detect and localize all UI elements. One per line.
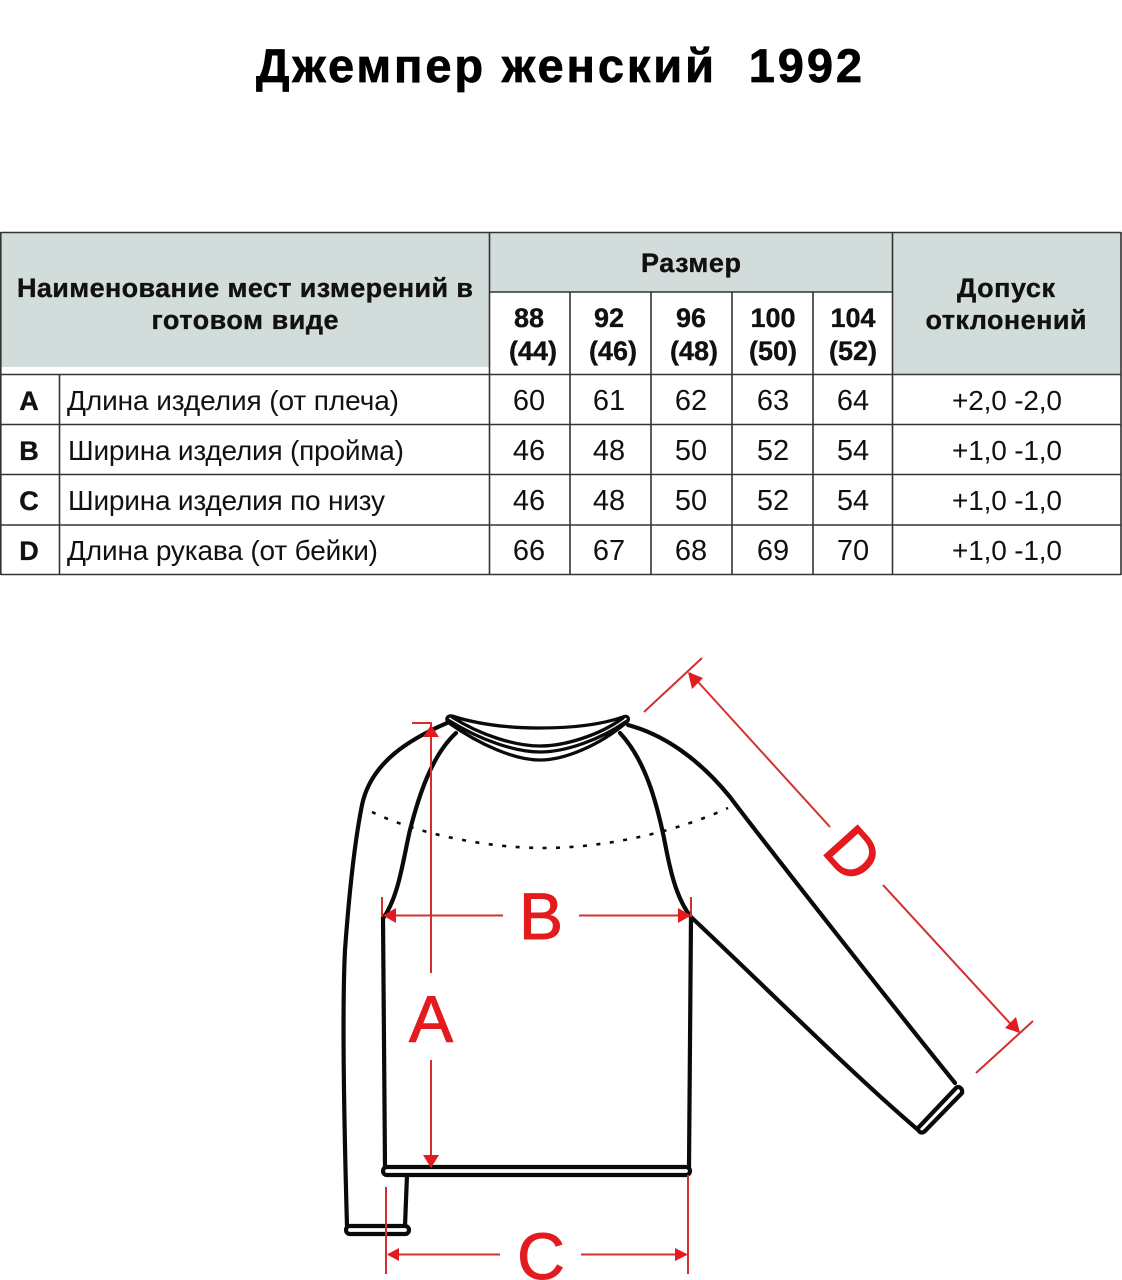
dotted yoke line [372, 808, 728, 848]
header: measurement name: Наименование мест измерений в [17, 273, 473, 303]
header: size: Размер [641, 248, 741, 278]
row C: 52 [757, 485, 789, 517]
row C: +1,0 -1,0 [952, 485, 1062, 516]
row C: 48 [593, 485, 625, 517]
row B [19, 435, 1062, 467]
right raglan seam [620, 733, 691, 917]
table header shading [1, 233, 1121, 374]
measure B: B [519, 879, 563, 953]
row A: 62 [675, 385, 707, 417]
row C: 50 [675, 485, 707, 517]
row C: C [19, 486, 39, 516]
header: size columns: (44) [509, 336, 557, 366]
measure A: A [409, 982, 453, 1056]
row D: 68 [675, 535, 707, 567]
left sleeve cuff [346, 1226, 409, 1234]
jumper outline [344, 716, 962, 1234]
table grid [1, 232, 1121, 575]
row B: +1,0 -1,0 [952, 435, 1062, 466]
header: size columns [509, 303, 877, 366]
size table [1, 232, 1121, 575]
right sleeve [628, 725, 955, 1129]
header: size columns: 96 [676, 303, 706, 333]
row D: 70 [837, 535, 869, 567]
body [383, 917, 691, 1167]
row C [19, 485, 1062, 517]
hem [383, 1167, 690, 1175]
header: size columns: 104 [830, 303, 876, 333]
header: tolerance: Допуск [957, 273, 1055, 303]
row B: 48 [593, 435, 625, 467]
row D [19, 535, 1062, 567]
row A: A [19, 386, 39, 416]
row C: 46 [513, 485, 545, 517]
row B: Ширина изделия (пройма) [68, 435, 404, 466]
header: measurement name [17, 273, 473, 335]
row A: +2,0 -2,0 [952, 385, 1062, 416]
row A: 60 [513, 385, 545, 417]
row A [19, 385, 1062, 417]
measure B [382, 879, 691, 953]
left raglan seam [384, 733, 456, 917]
measure C [386, 1175, 688, 1280]
row B: B [19, 436, 39, 466]
row B: 50 [675, 435, 707, 467]
row D: D [19, 536, 39, 566]
header: size columns: 100 [750, 303, 796, 333]
measure D [644, 658, 1033, 1073]
neckband [447, 716, 628, 760]
title: Джемпер женский 1992 [256, 39, 862, 92]
measure A [409, 723, 453, 1168]
header: size columns: (50) [749, 336, 797, 366]
jumper diagram [344, 658, 1033, 1280]
header: tolerance: отклонений [926, 305, 1086, 335]
row D: +1,0 -1,0 [952, 535, 1062, 566]
row C: 54 [837, 485, 869, 517]
row C: Ширина изделия по низу [68, 485, 385, 516]
row D: Длина рукава (от бейки) [67, 535, 378, 566]
row A: 61 [593, 385, 625, 417]
header: tolerance [926, 273, 1086, 335]
measure D: D [810, 811, 897, 896]
header: size columns: 88 [514, 303, 544, 333]
row D: 66 [513, 535, 545, 567]
row A: 63 [757, 385, 789, 417]
row D: 67 [593, 535, 625, 567]
header: measurement name: готовом виде [152, 305, 338, 335]
row B: 46 [513, 435, 545, 467]
left sleeve [344, 723, 447, 1226]
header: size columns: (52) [829, 336, 877, 366]
row B: 54 [837, 435, 869, 467]
header: size columns: 92 [594, 303, 624, 333]
header: size columns: (48) [670, 336, 718, 366]
right sleeve cuff [918, 1087, 962, 1132]
row A: Длина изделия (от плеча) [67, 385, 399, 416]
header: size columns: (46) [589, 336, 637, 366]
row B: 52 [757, 435, 789, 467]
row D: 69 [757, 535, 789, 567]
row A: 64 [837, 385, 869, 417]
